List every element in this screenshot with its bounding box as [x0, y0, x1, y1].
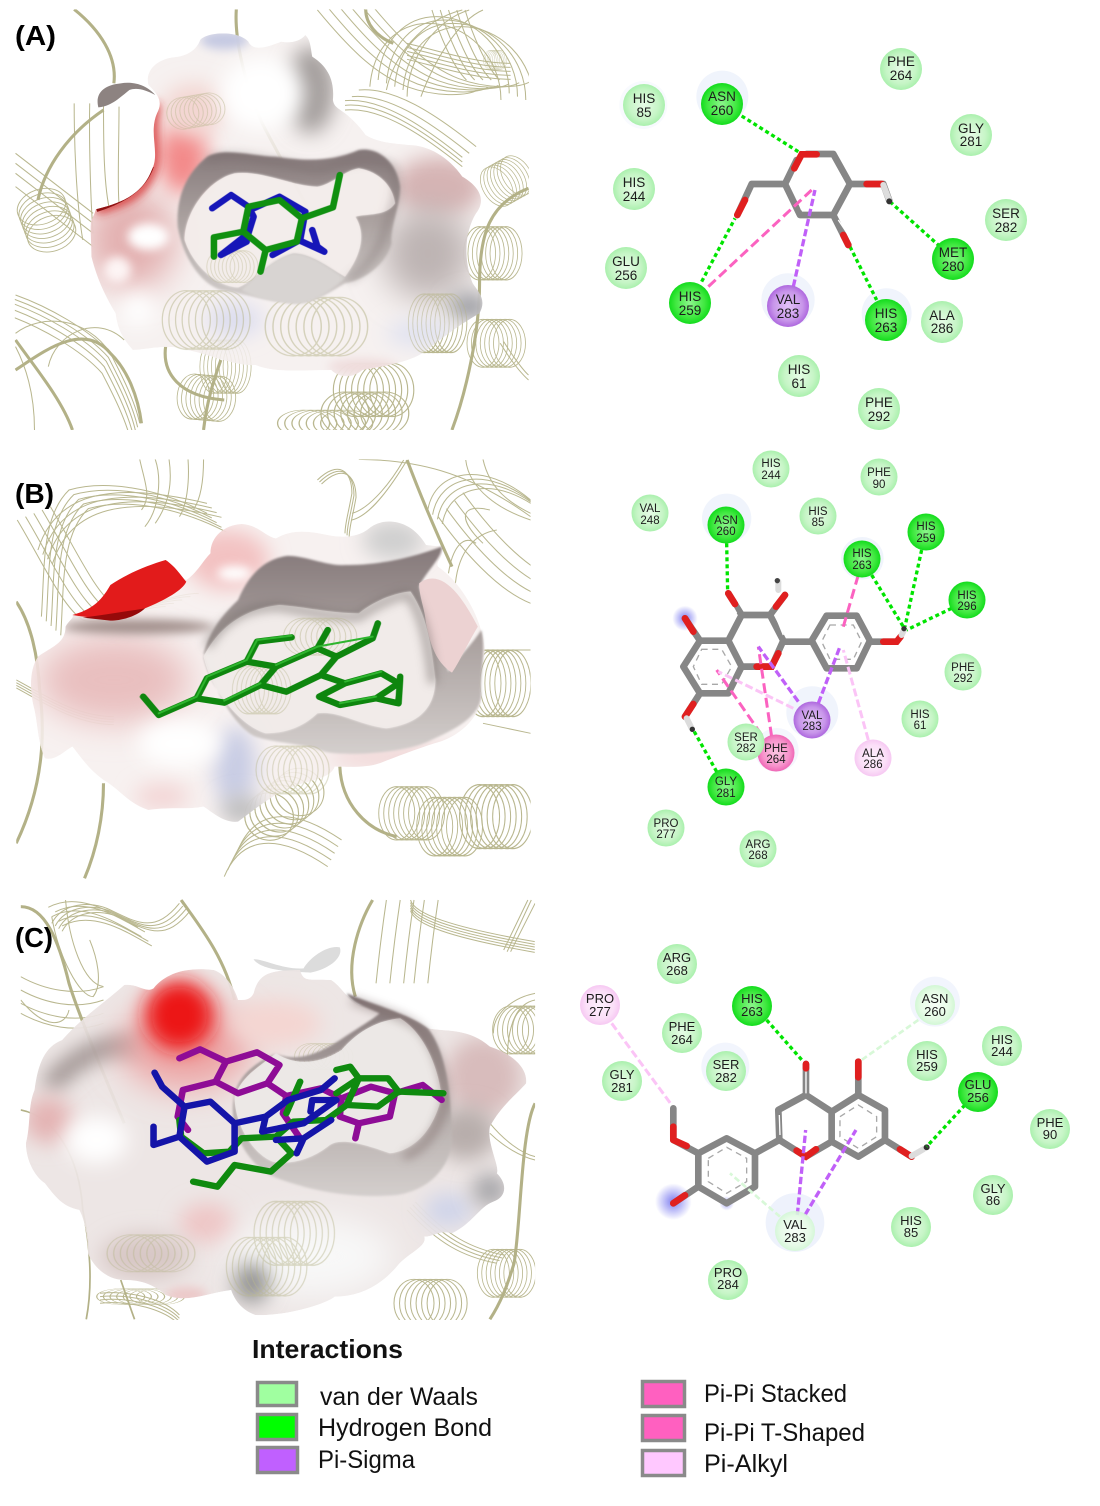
pose overlay coils B [232, 618, 357, 794]
pocket floor C [235, 1018, 442, 1163]
residue ARG 268: 268 [666, 963, 688, 978]
residue PHE 264: 264 [671, 1032, 693, 1047]
binding pocket rim A [177, 149, 400, 303]
residue HIS 259: HIS [916, 1047, 938, 1062]
residue HIS 85 [800, 498, 836, 534]
residue HIS 61: 61 [791, 376, 807, 391]
residue PHE 292 [858, 388, 900, 430]
residue ARG 268: ARG [663, 950, 691, 965]
red charged patch B [72, 560, 186, 618]
residue VAL 283: 283 [784, 1230, 806, 1245]
residue ASN 260 [701, 83, 743, 125]
residue HIS 259 [908, 514, 944, 550]
residue ALA 286: 286 [863, 759, 883, 771]
residue HIS 85: HIS [900, 1213, 922, 1228]
residue HIS 259 [669, 282, 711, 324]
residue PHE 264: PHE [887, 54, 915, 69]
residue PRO 277: 277 [589, 1004, 611, 1019]
residue HIS 61: 61 [914, 720, 926, 732]
pocket floor A [185, 168, 395, 287]
residue VAL 283: VAL [776, 292, 801, 307]
residue PHE 292: 292 [953, 673, 973, 685]
residue PRO 277: PRO [654, 818, 679, 830]
residue PHE 292: 292 [868, 409, 890, 424]
coils seen through surface A [162, 90, 467, 356]
molecule and bonds C [612, 977, 965, 1252]
residue ALA 286: ALA [929, 308, 955, 323]
panel A: 2D interaction diagram [605, 48, 1027, 430]
residue ALA 286: ALA [862, 748, 884, 760]
legend: Pi-Alkyl [642, 1450, 788, 1478]
residue PHE 292: PHE [865, 395, 893, 410]
label (A): (A) [15, 20, 56, 51]
protein ribbons A [7, 2, 540, 443]
ligand B [143, 623, 400, 715]
residue HIS 259: 259 [916, 533, 936, 545]
residue PHE 264: PHE [669, 1019, 696, 1034]
legend: Pi-Pi T-Shaped: Pi-Pi T-Shaped [704, 1419, 865, 1447]
pose: green [179, 1067, 443, 1187]
label (C): (C) [15, 922, 53, 953]
protein ribbons B [16, 459, 555, 878]
residue ALA 286 [921, 301, 963, 343]
residue MET 280: MET [939, 245, 967, 260]
residue HIS 61: HIS [788, 362, 810, 377]
residue VAL 283: 283 [777, 306, 799, 321]
residue PRO 284 [708, 1260, 748, 1300]
legend: Pi-Sigma [258, 1446, 415, 1474]
electrostatic surface B [31, 520, 485, 823]
residue GLU 256: GLU [965, 1077, 991, 1092]
residue HIS 85 [623, 84, 665, 126]
residue PHE 292: PHE [951, 662, 975, 674]
pocket lower lip A [242, 253, 345, 303]
residue GLU 256: GLU [612, 254, 640, 269]
residue HIS 259 [907, 1041, 947, 1081]
residue PRO 284: PRO [714, 1265, 742, 1280]
residue ASN 260 [708, 506, 744, 544]
residue VAL 283 [775, 1211, 815, 1251]
residue SER 282 [985, 199, 1027, 241]
residue HIS 296: 296 [957, 601, 977, 613]
residue PHE 90: 90 [873, 479, 885, 491]
legend: Pi-Sigma: Pi-Sigma [318, 1446, 415, 1474]
residue PHE 90: PHE [1037, 1115, 1064, 1130]
pocket shading B [207, 595, 433, 683]
residue GLY 281 [602, 1061, 642, 1101]
pocket upper shade A [207, 156, 397, 280]
residue HIS 244: HIS [991, 1032, 1013, 1047]
residue SER 282 [706, 1051, 746, 1091]
residue GLU 256 [605, 247, 647, 289]
residue MET 280: 280 [942, 259, 964, 274]
residue ASN 260: 260 [716, 526, 736, 538]
residue PHE 264 [758, 734, 794, 772]
legend: interactions [252, 1334, 865, 1478]
residue ASN 260: ASN [708, 89, 736, 104]
residue HIS 263: 263 [875, 320, 897, 335]
residue PHE 292 [944, 654, 982, 690]
residue HIS 61 [902, 700, 938, 738]
residue GLY 86: 86 [986, 1193, 1000, 1208]
residue SER 282: SER [713, 1057, 739, 1072]
ligand overlay A [212, 175, 340, 272]
protein ribbons C [21, 900, 558, 1327]
residue GLY 86 [973, 1175, 1013, 1215]
residue HIS 244: HIS [623, 175, 645, 190]
residue ASN 260: ASN [922, 991, 948, 1006]
residue MET 280 [932, 238, 974, 280]
legend: van der Waals: van der Waals [320, 1383, 478, 1411]
residue HIS 296 [948, 582, 986, 618]
residue HIS 61 [778, 355, 820, 397]
pose: purple [178, 1049, 442, 1138]
pose: blue [154, 1073, 336, 1162]
residue VAL 283: 283 [802, 721, 822, 733]
residue PRO 277: 277 [656, 829, 676, 841]
molecule and bonds B [672, 494, 952, 772]
panel B: 2D interaction diagram [632, 450, 986, 868]
residue PHE 264: 264 [890, 68, 913, 83]
right pink lobe B [419, 579, 478, 673]
red patch underside B [83, 608, 145, 621]
residue HIS 85: 85 [636, 105, 652, 120]
electrostatic surface A [86, 31, 490, 376]
residue HIS 244: 244 [623, 189, 646, 204]
overlaid ligand poses C [154, 1049, 443, 1187]
legend: Pi-Alkyl: Pi-Alkyl [704, 1450, 788, 1478]
residue GLU 256: 256 [967, 1090, 989, 1105]
residue HIS 263 [865, 299, 907, 341]
residue VAL 283 [767, 285, 809, 327]
residue GLY 86: GLY [980, 1181, 1006, 1196]
residue HIS 244 [613, 168, 655, 210]
residue VAL 283: VAL [783, 1217, 807, 1232]
residue PRO 277: PRO [586, 991, 614, 1006]
residue HIS 244 [752, 450, 790, 488]
residue HIS 244: HIS [761, 458, 781, 470]
residue ASN 260 [915, 985, 955, 1025]
residue HIS 263: 263 [741, 1004, 763, 1019]
residue HIS 85: 85 [904, 1225, 918, 1240]
legend: Hydrogen Bond: Hydrogen Bond [318, 1414, 492, 1442]
residue HIS 263 [844, 540, 880, 578]
residue GLU 256: 256 [615, 268, 637, 283]
residue HIS 244: 244 [761, 470, 781, 482]
residue SER 282: SER [734, 732, 758, 744]
residue PHE 264 [662, 1013, 702, 1053]
residue HIS 263: HIS [875, 306, 897, 321]
residue ARG 268 [657, 944, 697, 984]
residue SER 282: SER [992, 206, 1020, 221]
residue PHE 264: 264 [766, 754, 786, 766]
residue SER 282 [728, 724, 764, 760]
panel C: docking surface view [21, 900, 558, 1327]
residue ARG 268: ARG [746, 839, 771, 851]
residue GLY 281 [708, 768, 744, 806]
residue GLU 256 [958, 1072, 998, 1112]
residue HIS 259: 259 [916, 1059, 938, 1074]
surface flap A [98, 83, 155, 107]
legend: Pi-Pi T-Shaped [642, 1416, 865, 1447]
residue GLY 281: GLY [715, 776, 737, 788]
residue VAL 283: VAL [802, 710, 823, 722]
residue HIS 263: HIS [741, 991, 763, 1006]
residue PHE 90: PHE [867, 467, 891, 479]
residue ASN 260: ASN [714, 515, 738, 527]
residue PHE 264: PHE [764, 743, 788, 755]
residue GLY 281 [950, 114, 992, 156]
residue VAL 248 [632, 494, 668, 532]
residue PHE 264 [880, 48, 922, 90]
residue HIS 244 [982, 1026, 1022, 1066]
residue HIS 263: HIS [852, 548, 872, 560]
coils seen through surface C [107, 1043, 353, 1296]
residue HIS 259: HIS [916, 521, 936, 533]
residue PHE 90 [860, 458, 898, 496]
binding pocket rim C [233, 993, 452, 1196]
binding pocket rim B [204, 547, 483, 754]
residue HIS 61: HIS [910, 709, 930, 721]
residue PRO 277 [648, 810, 684, 846]
residue ASN 260: 260 [924, 1004, 946, 1019]
pose overlay coil A [207, 251, 258, 283]
legend: Pi-Pi Stacked: Pi-Pi Stacked [704, 1380, 847, 1408]
residue HIS 85: HIS [808, 506, 828, 518]
residue HIS 263: 263 [852, 560, 872, 572]
legend title: Interactions [252, 1334, 403, 1364]
residue HIS 85 [891, 1207, 931, 1247]
residue GLY 281: GLY [958, 121, 984, 136]
residue GLY 281: 281 [716, 788, 736, 800]
residue PHE 90: 90 [1043, 1127, 1057, 1142]
residue HIS 263 [732, 986, 772, 1026]
residue ALA 286 [854, 740, 892, 776]
pocket rim shading C [352, 1000, 445, 1157]
residue HIS 259: 259 [679, 303, 701, 318]
surface flap C [254, 947, 340, 973]
residue ASN 260: 260 [711, 103, 733, 118]
residue VAL 283 [794, 702, 830, 738]
residue SER 282: 282 [736, 743, 756, 755]
residue GLY 281: 281 [960, 134, 982, 149]
residue VAL 248: VAL [640, 503, 661, 515]
residue SER 282: 282 [715, 1070, 737, 1085]
residue GLY 281: 281 [611, 1080, 633, 1095]
residue ARG 268 [740, 830, 776, 868]
residue PRO 277 [580, 985, 620, 1025]
panel C: 2D interaction diagram [580, 944, 1070, 1300]
residue HIS 259: HIS [679, 289, 701, 304]
molecule and bonds A [619, 71, 938, 338]
pocket floor B [204, 592, 435, 733]
residue ALA 286: 286 [931, 321, 953, 336]
residue PHE 90 [1030, 1109, 1070, 1149]
electrostatic surface C [24, 969, 526, 1315]
panel B: docking surface view [16, 459, 555, 878]
residue GLY 281: GLY [609, 1067, 635, 1082]
residue HIS 244: 244 [991, 1044, 1013, 1059]
residue PRO 284: 284 [717, 1277, 739, 1292]
panel A: docking surface view [7, 2, 540, 443]
residue VAL 248: 248 [640, 515, 660, 527]
legend: Pi-Pi Stacked [642, 1380, 847, 1408]
residue HIS 85: 85 [812, 517, 824, 529]
residue ARG 268: 268 [748, 850, 768, 862]
residue HIS 296: HIS [957, 590, 977, 602]
label (B): (B) [15, 478, 54, 509]
residue HIS 85: HIS [633, 91, 655, 106]
residue SER 282: 282 [995, 220, 1017, 235]
